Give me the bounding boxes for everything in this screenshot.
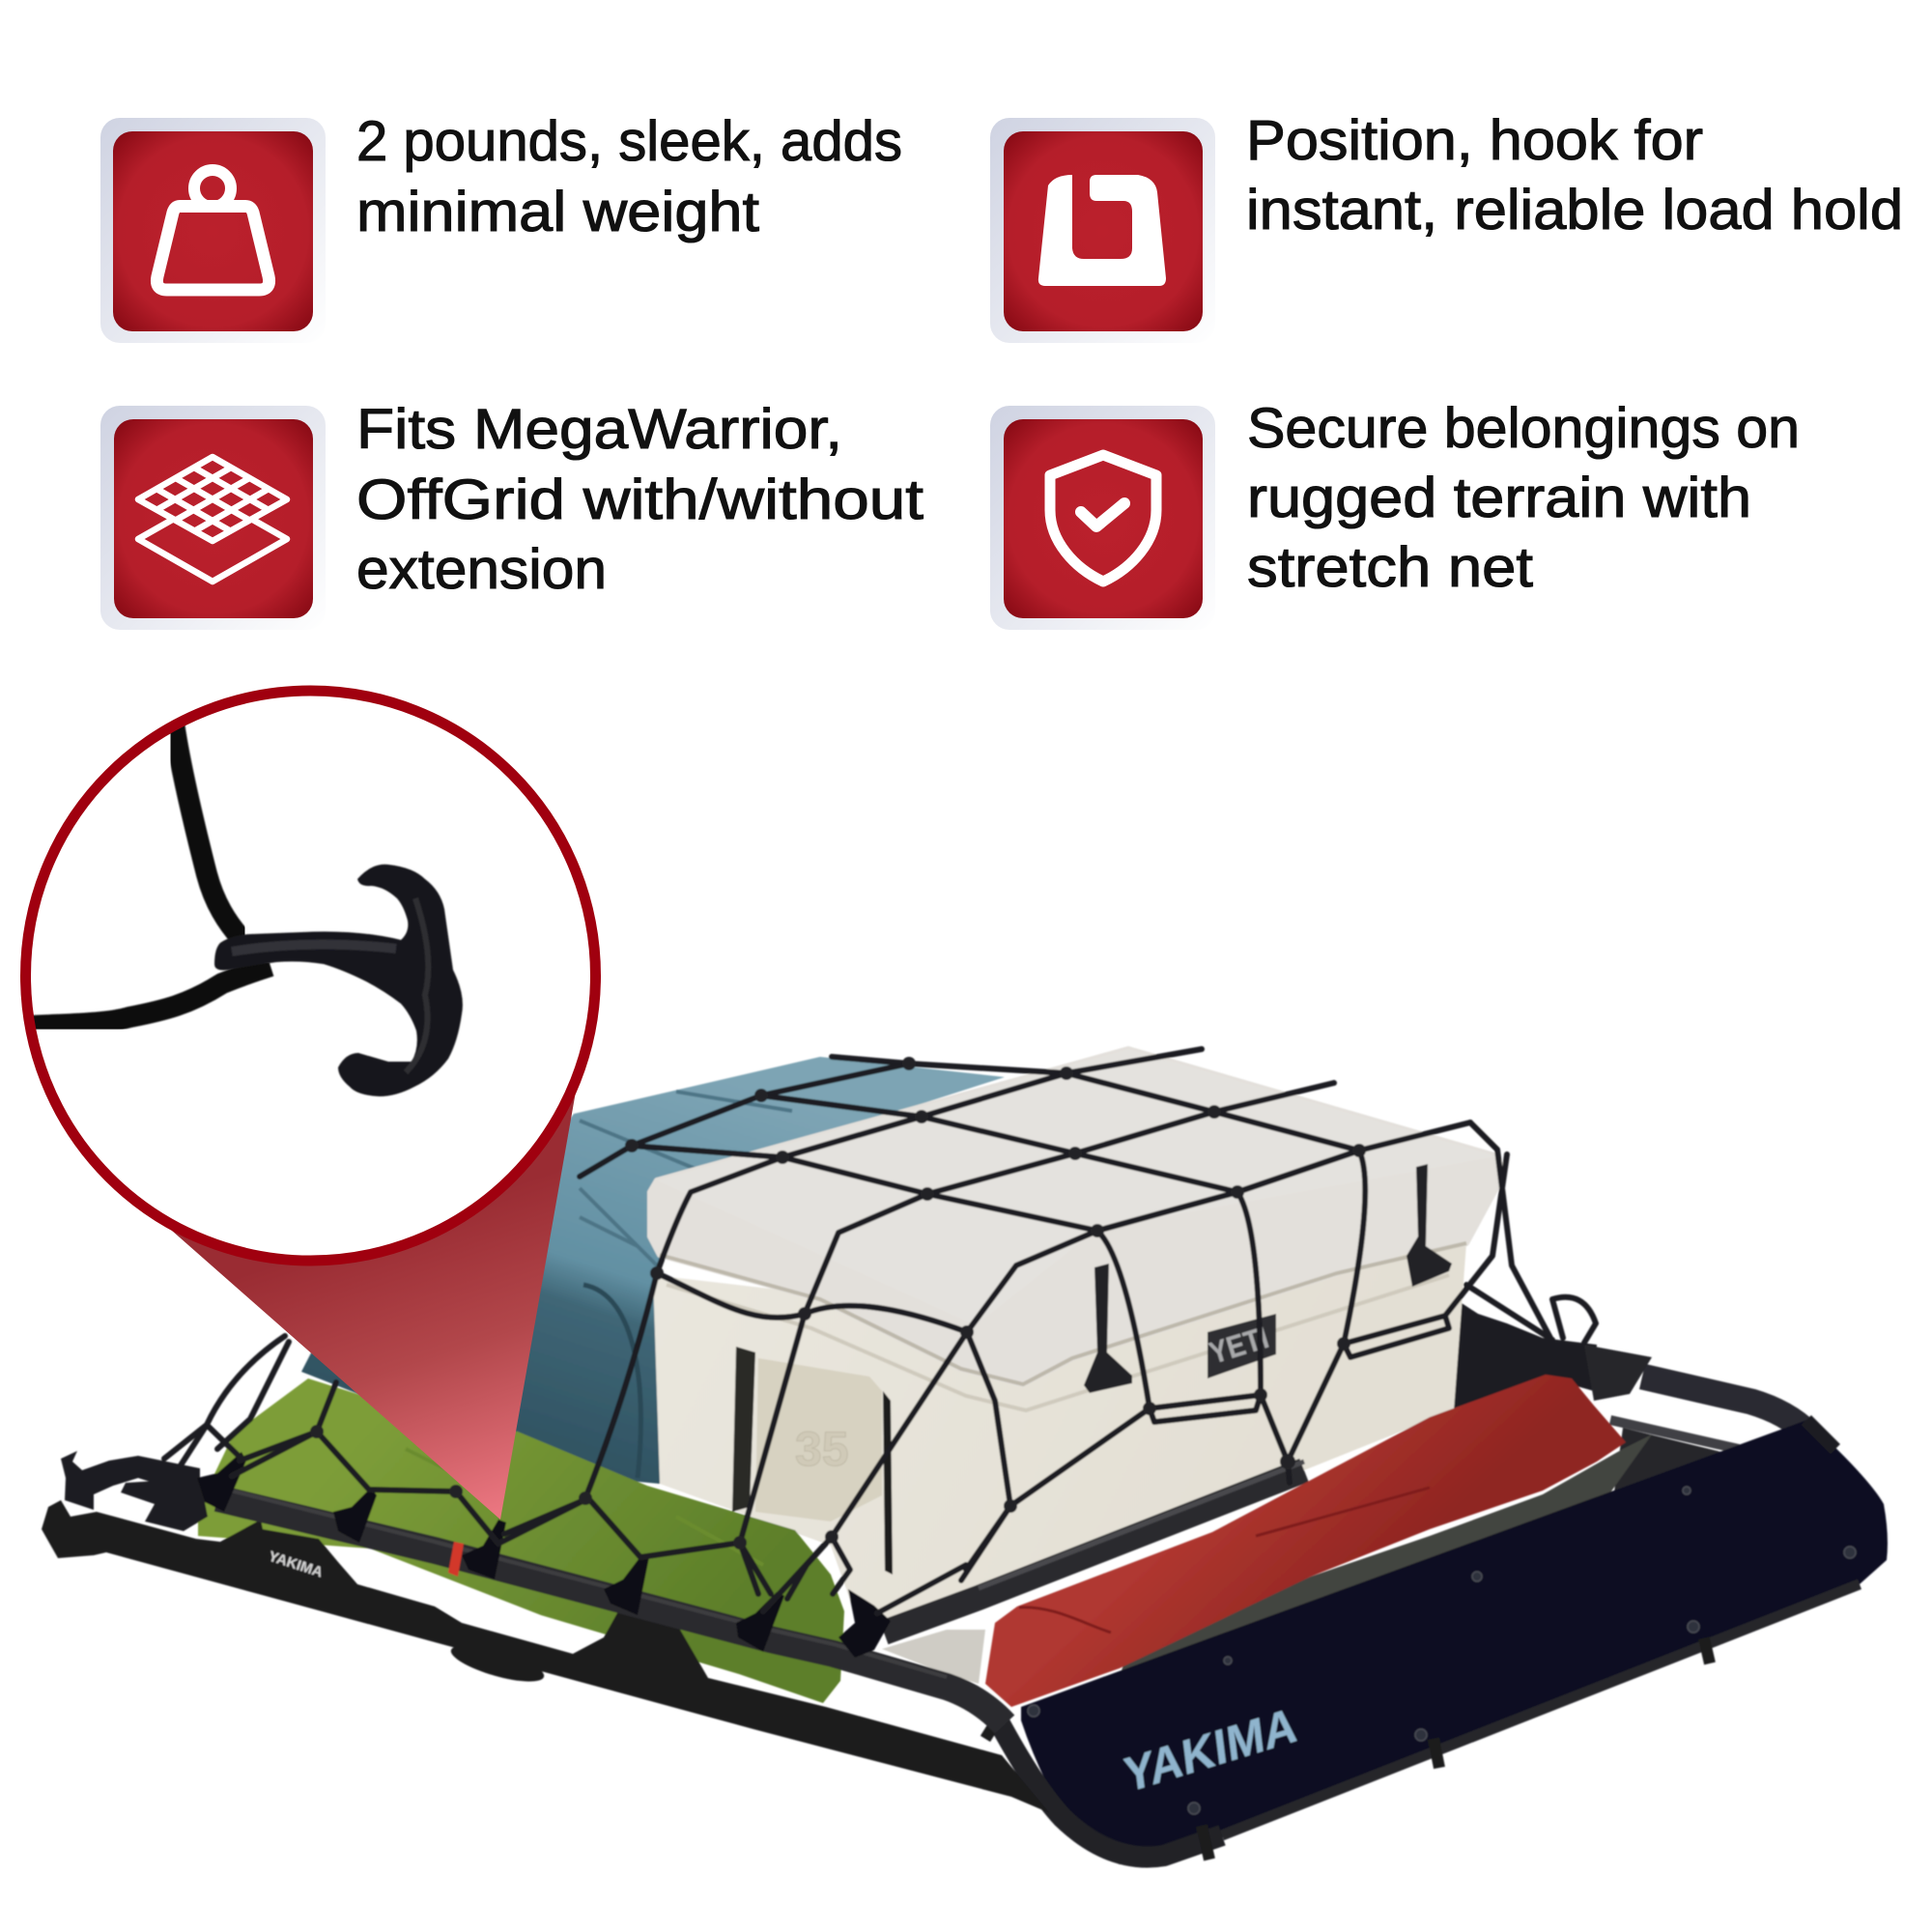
cooler logo badge: YETI: [1206, 1320, 1272, 1371]
circle background: [25, 691, 595, 1261]
text: fit feature: extension: [356, 538, 607, 601]
bungee net: [164, 1049, 1596, 1613]
text: weight feature: [356, 110, 902, 243]
feature: security: [990, 397, 1800, 630]
cooler side panel: [755, 1358, 882, 1521]
inner rear rail: [1610, 1420, 1739, 1449]
text: fit feature: Fits MegaWarrior,: [356, 398, 842, 461]
net knots: [310, 1057, 1366, 1549]
text: security feature: [1247, 397, 1800, 599]
black bag behind cooler: [1449, 1301, 1597, 1410]
cord lower: [33, 966, 270, 1026]
cooler: [650, 1049, 1504, 1684]
circle ring: [25, 691, 595, 1261]
cooler body: [653, 1243, 1466, 1623]
net lines down sides: [657, 1273, 967, 1332]
rear rack rails: [1584, 1345, 1808, 1499]
illustration: loaded roof rack: [42, 1049, 1888, 1864]
blue duffel bag: [301, 1057, 1005, 1484]
cooler latch right: [1406, 1164, 1452, 1287]
rack feet: [447, 1638, 548, 1689]
panel: feature grid: [100, 109, 1903, 630]
icon: shield check: [990, 406, 1215, 630]
text: security feature: Secure belongings on: [1247, 397, 1800, 460]
net lines over green bag: [232, 1382, 336, 1476]
cord upper: [174, 723, 242, 939]
plastic hook: [214, 865, 463, 1096]
cooler handle slot: [732, 1347, 755, 1512]
front rack rail: [42, 1451, 1050, 1813]
text: hook feature: [1246, 109, 1903, 242]
fairing frame: [995, 1420, 1860, 1857]
red marker: [448, 1542, 464, 1577]
cooler lower section: [882, 1630, 985, 1684]
fairing panel: [1021, 1420, 1888, 1864]
text: weight feature: 2 pounds, sleek, adds: [356, 110, 902, 173]
feature: fit: [100, 398, 923, 630]
feature: weight: [100, 110, 902, 343]
fairing logo: YAKIMA: [1121, 1696, 1299, 1804]
red bag: [985, 1375, 1626, 1707]
rack logo: YAKIMA: [267, 1548, 325, 1581]
cooler latch left: [1084, 1264, 1132, 1393]
text: hook feature: Position, hook for: [1246, 109, 1703, 172]
icon: weight: [100, 118, 326, 343]
net lines over top: [832, 1049, 1202, 1073]
dark gear under rail: [1613, 1428, 1729, 1499]
text: fit feature: [356, 398, 923, 601]
grey tarp bag: [1120, 1435, 1652, 1676]
embossed size: 35: [795, 1422, 849, 1476]
icon: hook: [990, 118, 1215, 343]
text: hook feature: instant, reliable load hold: [1246, 179, 1903, 242]
main rail: [217, 1490, 1005, 1724]
lower frame band: [42, 1500, 1050, 1813]
fairing clamps: [985, 1638, 1710, 1860]
text: weight feature: minimal weight: [356, 181, 759, 243]
icon: layered grid: [100, 406, 326, 630]
cooler lid: [650, 1049, 1504, 1384]
rail joint: [1584, 1345, 1652, 1401]
feature: hook: [990, 109, 1903, 343]
callout: zoom cone: [172, 1092, 576, 1520]
fairing: [985, 1420, 1888, 1864]
rack end tube and hook: [61, 1451, 208, 1531]
text: security feature: rugged terrain with: [1247, 467, 1751, 529]
green bag: [198, 1378, 844, 1703]
callout: magnified hook circle: [25, 691, 595, 1261]
outer rear rail: [1642, 1377, 1808, 1434]
text: security feature: stretch net: [1247, 536, 1533, 599]
text: fit feature: OffGrid with/without: [356, 469, 923, 531]
cross rail: [884, 1462, 1304, 1633]
fairing screws: [1028, 1487, 1856, 1814]
net hooks: [197, 1452, 891, 1658]
